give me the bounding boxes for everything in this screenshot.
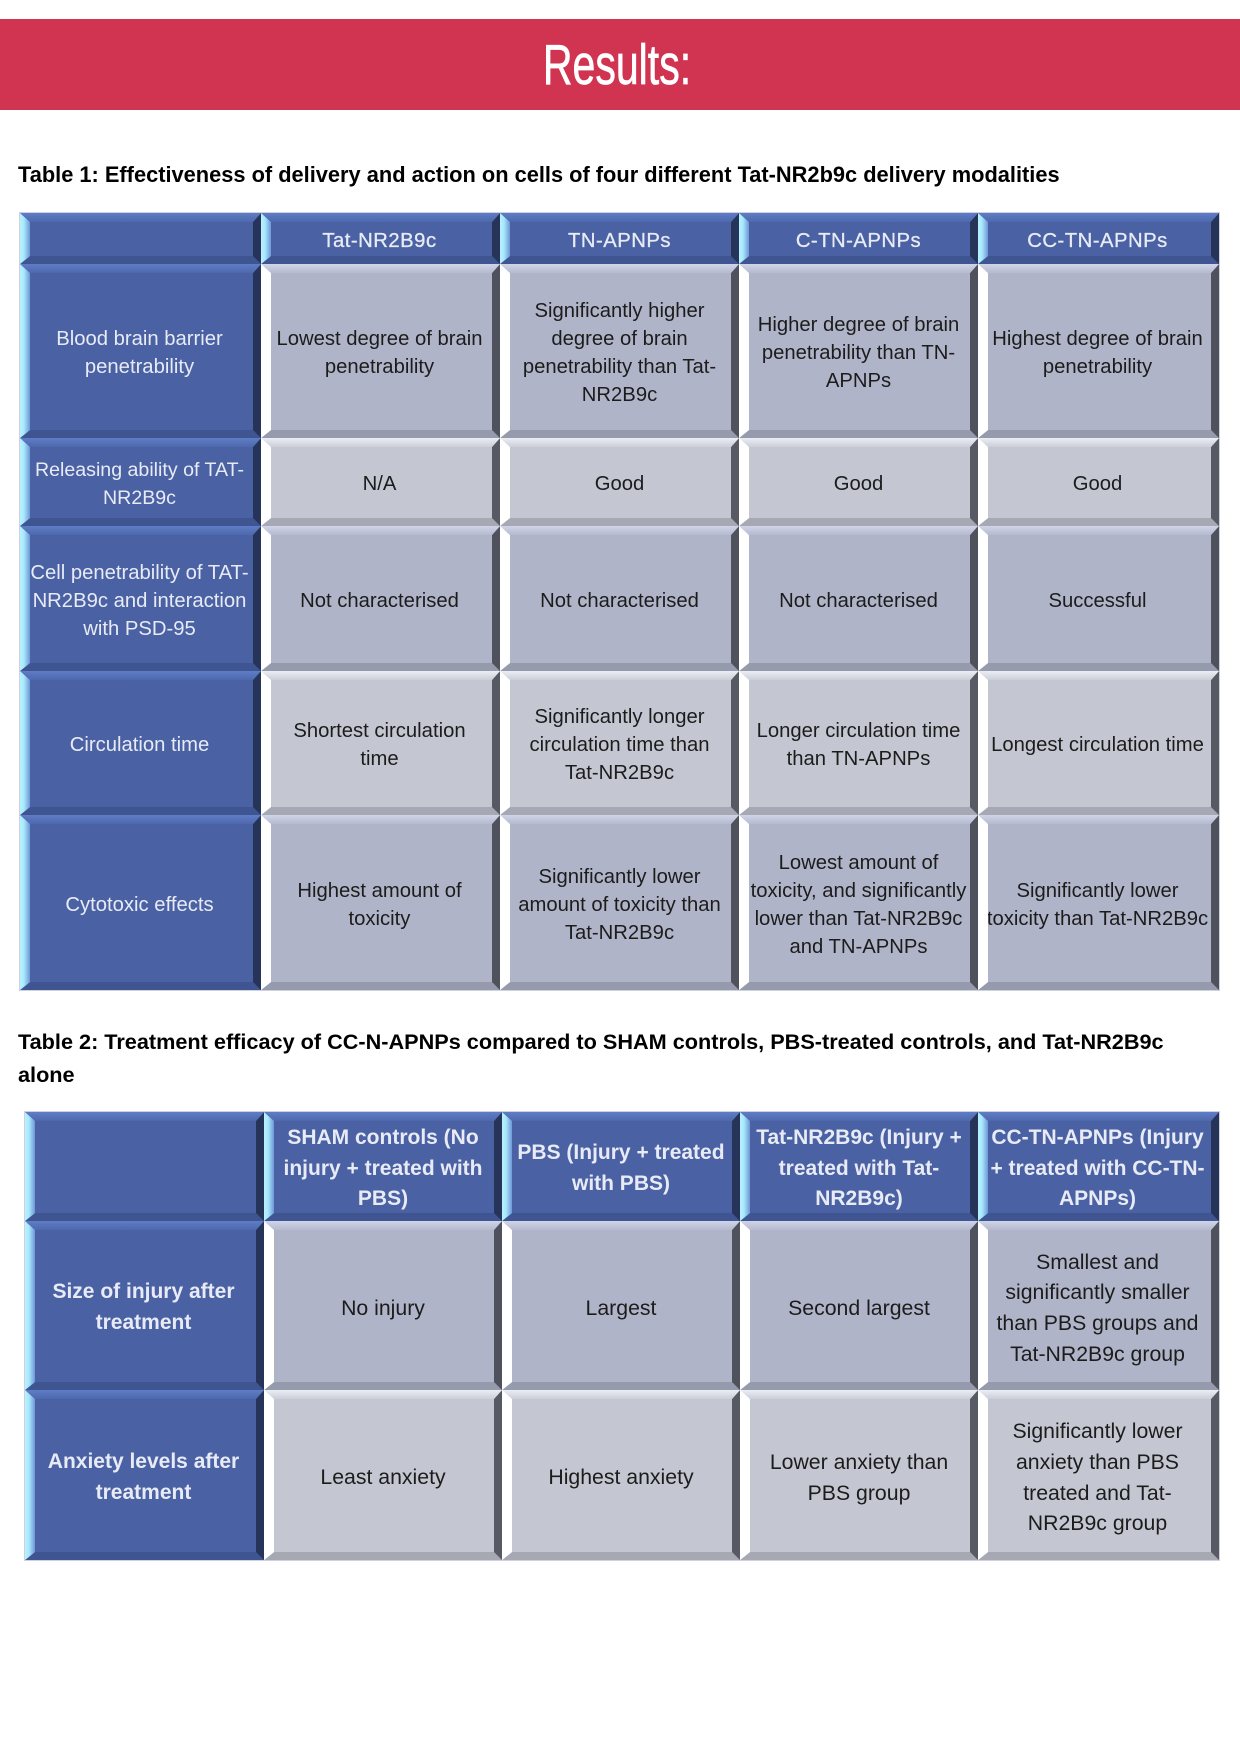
cell: CC-TN-APNPs cell penetrability: Successful (1049, 590, 1146, 612)
cell: Tat-NR2B9c release (261, 438, 500, 526)
cell: TN-APNPs cell penetrability (500, 526, 739, 671)
cell: TN-APNPs toxicity: Significantly lower (538, 866, 701, 888)
cell: C-TN-APNPs cell penetrability (739, 526, 978, 671)
row header: size of injury: Size of injury after (52, 1280, 235, 1303)
cell: Tat-NR2B9c injury (740, 1221, 978, 1390)
row header: cytotoxic effects: Cytotoxic effects (65, 894, 214, 916)
column header: TN-APNPs (500, 213, 739, 264)
cell: C-TN-APNPs circulation: than TN-APNPs (787, 748, 930, 770)
cell: C-TN-APNPs penetrability: penetrability than TN- (762, 342, 955, 364)
cell: C-TN-APNPs toxicity: Lowest amount of (779, 852, 938, 874)
row header: size of injury (25, 1221, 264, 1390)
cell: TN-APNPs penetrability: Significantly higher (534, 300, 704, 322)
cell: TN-APNPs toxicity (500, 815, 739, 990)
cell: Tat-NR2B9c penetrability: penetrability (325, 356, 434, 378)
column header: CC-TN-APNPs (978, 1112, 1219, 1221)
cell: C-TN-APNPs toxicity: and TN-APNPs (789, 936, 928, 958)
cell: Tat-NR2B9c circulation (261, 671, 500, 815)
cell: SHAM injury (264, 1221, 502, 1390)
cell: C-TN-APNPs toxicity: toxicity, and significantly (751, 880, 966, 902)
heading: table 1: Table 1: Effectiveness of delivery and action on cells of four different Tat-NR2b9c delivery modalities (18, 162, 1060, 187)
cell: C-TN-APNPs penetrability (739, 264, 978, 438)
cell: Tat-NR2B9c toxicity (261, 815, 500, 990)
cell: TN-APNPs penetrability: NR2B9c (582, 384, 657, 406)
cell: Tat-NR2B9c cell penetrability (261, 526, 500, 671)
column header: PBS: with PBS) (572, 1172, 670, 1195)
column header: C-TN-APNPs: C-TN-APNPs (796, 230, 921, 252)
table 2 (24, 1111, 1220, 1561)
column header: CC-TN-APNPs: + treated with CC-TN- (990, 1157, 1205, 1180)
cell: PBS anxiety: Highest anxiety (548, 1465, 694, 1489)
cell: Tat-NR2B9c toxicity: toxicity (349, 908, 410, 930)
cell: TN-APNPs penetrability: degree of brain (551, 328, 688, 350)
cell: Tat-NR2B9c anxiety (740, 1390, 978, 1560)
cell: CC-TN-APNPs penetrability: Highest degree of brain (992, 328, 1203, 350)
cell: C-TN-APNPs cell penetrability: Not characterised (779, 590, 938, 612)
row header: circulation time: Circulation time (70, 734, 209, 756)
cell: CC-TN-APNPs anxiety (978, 1390, 1219, 1560)
title banner: Results: (543, 33, 691, 97)
column header: SHAM controls: PBS) (358, 1187, 408, 1210)
cell: CC-TN-APNPs penetrability (978, 264, 1219, 438)
cell: CC-TN-APNPs penetrability: penetrability (1043, 356, 1152, 378)
cell: TN-APNPs circulation: Significantly longer (534, 706, 704, 728)
cell: TN-APNPs toxicity: Tat-NR2B9c (565, 922, 674, 944)
cell: CC-TN-APNPs injury: Smallest and (1036, 1250, 1159, 1274)
row header: cytotoxic effects (20, 815, 261, 990)
column header: Tat-NR2B9c: Tat-NR2B9c (322, 230, 437, 252)
cell: CC-TN-APNPs release: Good (1073, 473, 1122, 495)
title banner (0, 19, 1240, 110)
row header: cell penetrability: Cell penetrability of TAT- (30, 562, 249, 584)
row header: size of injury: treatment (96, 1311, 191, 1334)
cell: CC-TN-APNPs toxicity: toxicity than Tat-NR2B9c (987, 908, 1208, 930)
cell: C-TN-APNPs release: Good (834, 473, 883, 495)
cell: CC-TN-APNPs circulation: Longest circulation time (991, 734, 1204, 756)
cell: Tat-NR2B9c cell penetrability: Not characterised (300, 590, 459, 612)
row header: releasing ability (20, 438, 261, 526)
column header: Tat-NR2B9c: NR2B9c) (815, 1187, 903, 1210)
cell: Tat-NR2B9c anxiety: PBS group (808, 1480, 910, 1504)
row header: cell penetrability: NR2B9c and interaction (33, 590, 246, 612)
cell: CC-TN-APNPs anxiety: treated and Tat- (1023, 1480, 1172, 1504)
row header: releasing ability: NR2B9c (103, 487, 176, 509)
column header: CC-TN-APNPs: CC-TN-APNPs (Injury (991, 1126, 1204, 1149)
column header: Tat-NR2B9c (740, 1112, 978, 1221)
cell: TN-APNPs cell penetrability: Not characterised (540, 590, 699, 612)
cell: TN-APNPs circulation (500, 671, 739, 815)
cell: CC-TN-APNPs toxicity: Significantly lower (1016, 880, 1179, 902)
row header: blood brain barrier: Blood brain barrier (56, 328, 223, 350)
cell: PBS injury (502, 1221, 740, 1390)
cell: TN-APNPs penetrability (500, 264, 739, 438)
column header: SHAM controls: SHAM controls (No (287, 1126, 479, 1149)
cell: Tat-NR2B9c injury: Second largest (788, 1296, 930, 1320)
column header: Tat-NR2B9c: Tat-NR2B9c (Injury + (756, 1126, 962, 1149)
heading: table 2: Table 2: Treatment efficacy of CC-N-APNPs compared to SHAM controls, PBS-treated controls, and Tat-NR2B9c (18, 1029, 1164, 1054)
cell: C-TN-APNPs toxicity: lower than Tat-NR2B9c (755, 908, 962, 930)
cell: CC-TN-APNPs cell penetrability (978, 526, 1219, 671)
cell: CC-TN-APNPs injury: significantly smaller (1005, 1280, 1190, 1304)
column header: CC-TN-APNPs: APNPs) (1059, 1187, 1136, 1210)
cell: TN-APNPs circulation: circulation time than (529, 734, 710, 756)
cell: CC-TN-APNPs injury: than PBS groups and (996, 1311, 1199, 1335)
row header: blood brain barrier (20, 264, 261, 438)
cell: Tat-NR2B9c release: N/A (363, 473, 396, 495)
cell: TN-APNPs penetrability: penetrability than Tat- (523, 356, 716, 378)
cell: C-TN-APNPs release (739, 438, 978, 526)
row header: circulation time (20, 671, 261, 815)
column header: PBS (502, 1112, 740, 1221)
heading: table 2: alone (18, 1062, 75, 1087)
cell: TN-APNPs release: Good (595, 473, 644, 495)
cell: CC-TN-APNPs injury: Tat-NR2B9c group (1010, 1342, 1185, 1366)
corner header cell (25, 1112, 264, 1221)
cell: CC-TN-APNPs injury (978, 1221, 1219, 1390)
cell: SHAM anxiety (264, 1390, 502, 1560)
cell: Tat-NR2B9c circulation: time (360, 748, 399, 770)
column header: CC-TN-APNPs: CC-TN-APNPs (1027, 230, 1168, 252)
column header: SHAM controls: injury + treated with (284, 1157, 482, 1180)
cell: TN-APNPs toxicity: amount of toxicity than (518, 894, 721, 916)
cell: CC-TN-APNPs anxiety: NR2B9c group (1028, 1511, 1167, 1535)
cell: Tat-NR2B9c penetrability: Lowest degree of brain (276, 328, 482, 350)
cell: C-TN-APNPs penetrability: APNPs (826, 370, 891, 392)
column header: PBS: PBS (Injury + treated (517, 1141, 725, 1164)
cell: SHAM anxiety: Least anxiety (320, 1465, 446, 1489)
row header: releasing ability: Releasing ability of TAT- (35, 459, 244, 481)
cell: PBS injury: Largest (586, 1296, 656, 1320)
corner header cell (20, 213, 261, 264)
cell: TN-APNPs circulation: Tat-NR2B9c (565, 762, 674, 784)
column header: Tat-NR2B9c: treated with Tat- (779, 1157, 939, 1180)
row header: blood brain barrier: penetrability (85, 356, 194, 378)
row header: cell penetrability (20, 526, 261, 671)
cell: CC-TN-APNPs toxicity (978, 815, 1219, 990)
cell: C-TN-APNPs circulation: Longer circulation time (757, 720, 960, 742)
cell: Tat-NR2B9c anxiety: Lower anxiety than (770, 1450, 948, 1474)
cell: C-TN-APNPs toxicity (739, 815, 978, 990)
row header: anxiety levels: treatment (96, 1480, 191, 1504)
cell: Tat-NR2B9c penetrability (261, 264, 500, 438)
column header: SHAM controls (264, 1112, 502, 1221)
cell: Tat-NR2B9c toxicity: Highest amount of (297, 880, 462, 902)
table 1 (19, 212, 1220, 991)
cell: CC-TN-APNPs circulation (978, 671, 1219, 815)
cell: CC-TN-APNPs anxiety: Significantly lower (1012, 1419, 1183, 1443)
heading: table 2 (18, 1029, 1164, 1087)
cell: C-TN-APNPs circulation (739, 671, 978, 815)
column header: TN-APNPs: TN-APNPs (568, 230, 671, 252)
cell: CC-TN-APNPs anxiety: anxiety than PBS (1016, 1450, 1179, 1474)
cell: TN-APNPs release (500, 438, 739, 526)
row header: cell penetrability: with PSD-95 (83, 618, 196, 640)
row header: anxiety levels: Anxiety levels after (48, 1450, 239, 1473)
column header: Tat-NR2B9c (261, 213, 500, 264)
column header: CC-TN-APNPs (978, 213, 1219, 264)
row header: anxiety levels (25, 1390, 264, 1560)
column header: C-TN-APNPs (739, 213, 978, 264)
cell: PBS anxiety (502, 1390, 740, 1560)
cell: CC-TN-APNPs release (978, 438, 1219, 526)
cell: C-TN-APNPs penetrability: Higher degree of brain (758, 314, 959, 336)
cell: SHAM injury: No injury (341, 1296, 425, 1320)
cell: Tat-NR2B9c circulation: Shortest circulation (293, 720, 466, 742)
